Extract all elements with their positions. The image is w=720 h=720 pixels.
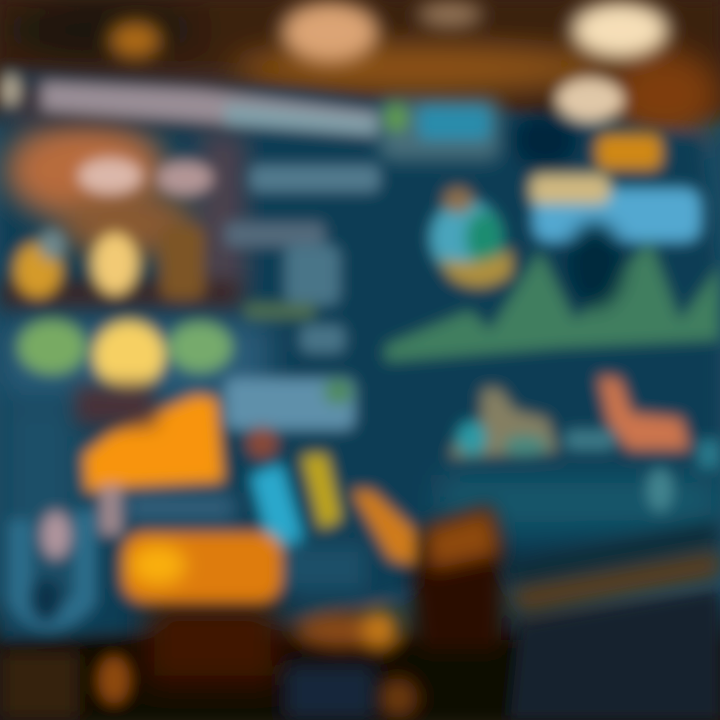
blue and yellow bars — [246, 427, 365, 590]
foreground: orange glowing objects — [0, 490, 520, 720]
lower left ring icon — [20, 485, 235, 622]
left icons row — [14, 225, 205, 300]
orange chart shape — [75, 385, 224, 492]
right header blocks — [380, 78, 662, 170]
title text band — [0, 74, 380, 136]
small bar charts — [448, 376, 720, 512]
background: warm room at the top — [0, 0, 720, 140]
green and yellow badges — [18, 320, 232, 389]
bottom right table edge — [285, 520, 720, 720]
left text lines — [225, 222, 355, 430]
blue callout — [530, 174, 701, 242]
display board — [0, 70, 720, 640]
subheading labels — [78, 158, 380, 195]
green area chart — [385, 223, 720, 362]
pie chart — [430, 187, 512, 287]
